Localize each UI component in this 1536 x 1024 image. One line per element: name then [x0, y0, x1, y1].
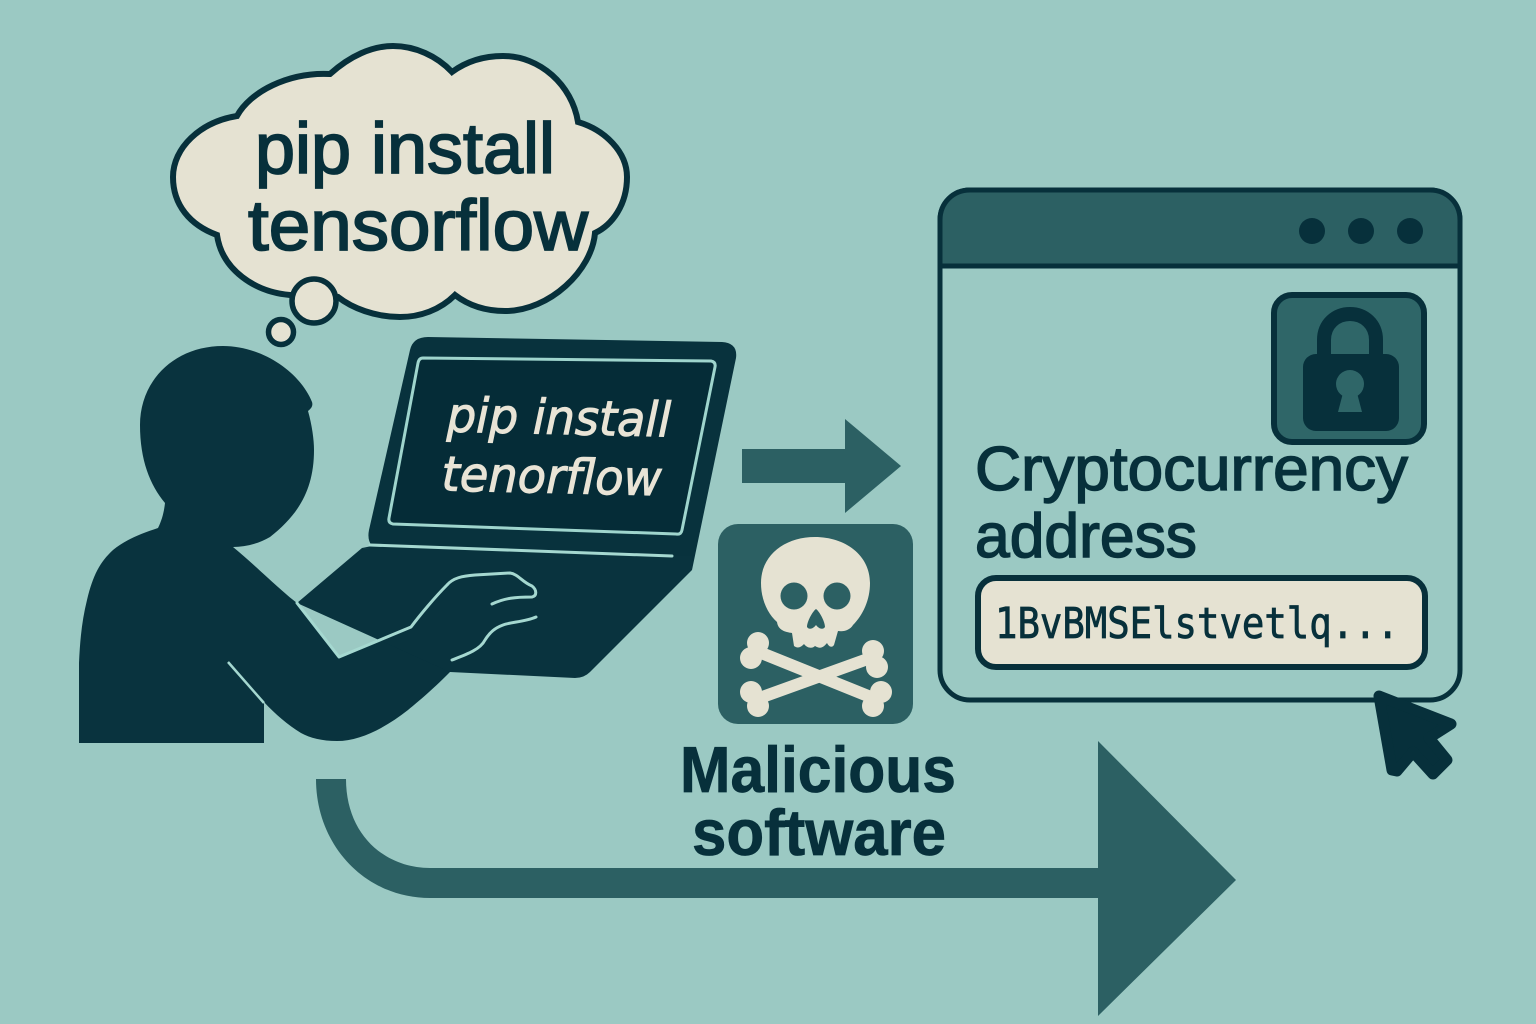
- laptop lid: [362, 337, 736, 570]
- laptop base: [297, 548, 692, 678]
- malicious software label: Malicious: [680, 733, 956, 806]
- crossbones: [740, 632, 892, 717]
- skull: [761, 537, 870, 648]
- malicious software label: software: [692, 796, 946, 869]
- thought bubble: [173, 46, 627, 344]
- lock icon: [1274, 295, 1424, 442]
- laptop screen text: tenorflow: [441, 446, 663, 507]
- window dots: [1299, 218, 1423, 244]
- address label: address: [975, 502, 1197, 571]
- malicious software icon: [718, 524, 913, 724]
- cursor: [1379, 696, 1451, 774]
- person silhouette: [79, 346, 536, 743]
- bubble text: pip install: [255, 110, 555, 189]
- laptop screen text: pip install: [445, 388, 672, 449]
- laptop: [228, 337, 736, 703]
- browser window: [940, 190, 1460, 700]
- small arrow: [742, 419, 901, 513]
- bubble text: tensorflow: [248, 187, 589, 266]
- address label: Cryptocurrency: [975, 435, 1408, 504]
- large arrow: [316, 741, 1236, 1016]
- address field: 1BvBMSElstvetlq...: [995, 599, 1399, 649]
- address field: [978, 578, 1425, 667]
- browser title bar: [940, 190, 1460, 266]
- laptop screen: [389, 358, 715, 534]
